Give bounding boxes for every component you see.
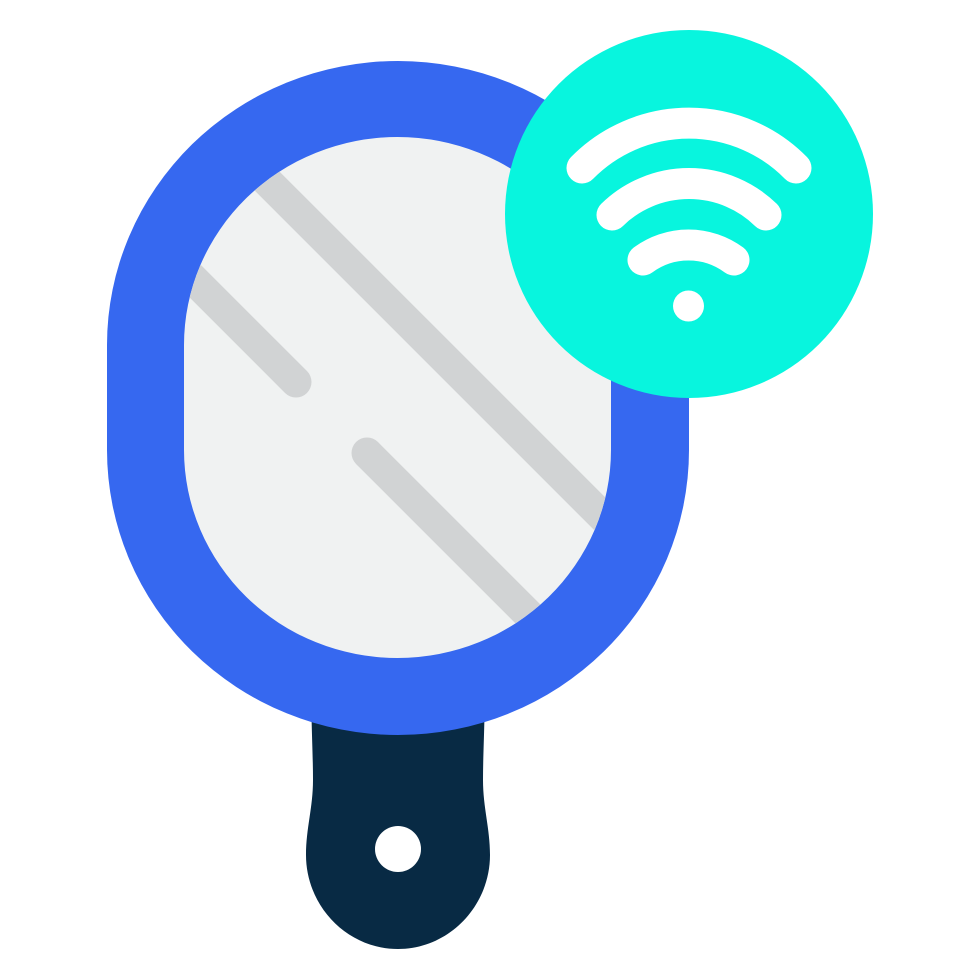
mirror handle bbox=[306, 715, 490, 949]
wifi signal arcs bbox=[582, 123, 796, 260]
wifi dot bbox=[673, 290, 704, 322]
wifi badge bbox=[505, 30, 873, 398]
mirror frame bbox=[107, 61, 689, 735]
icon: smart mirror with wifi bbox=[107, 30, 873, 949]
glass reflections bbox=[190, 172, 606, 624]
mirror glass bbox=[170, 137, 640, 658]
